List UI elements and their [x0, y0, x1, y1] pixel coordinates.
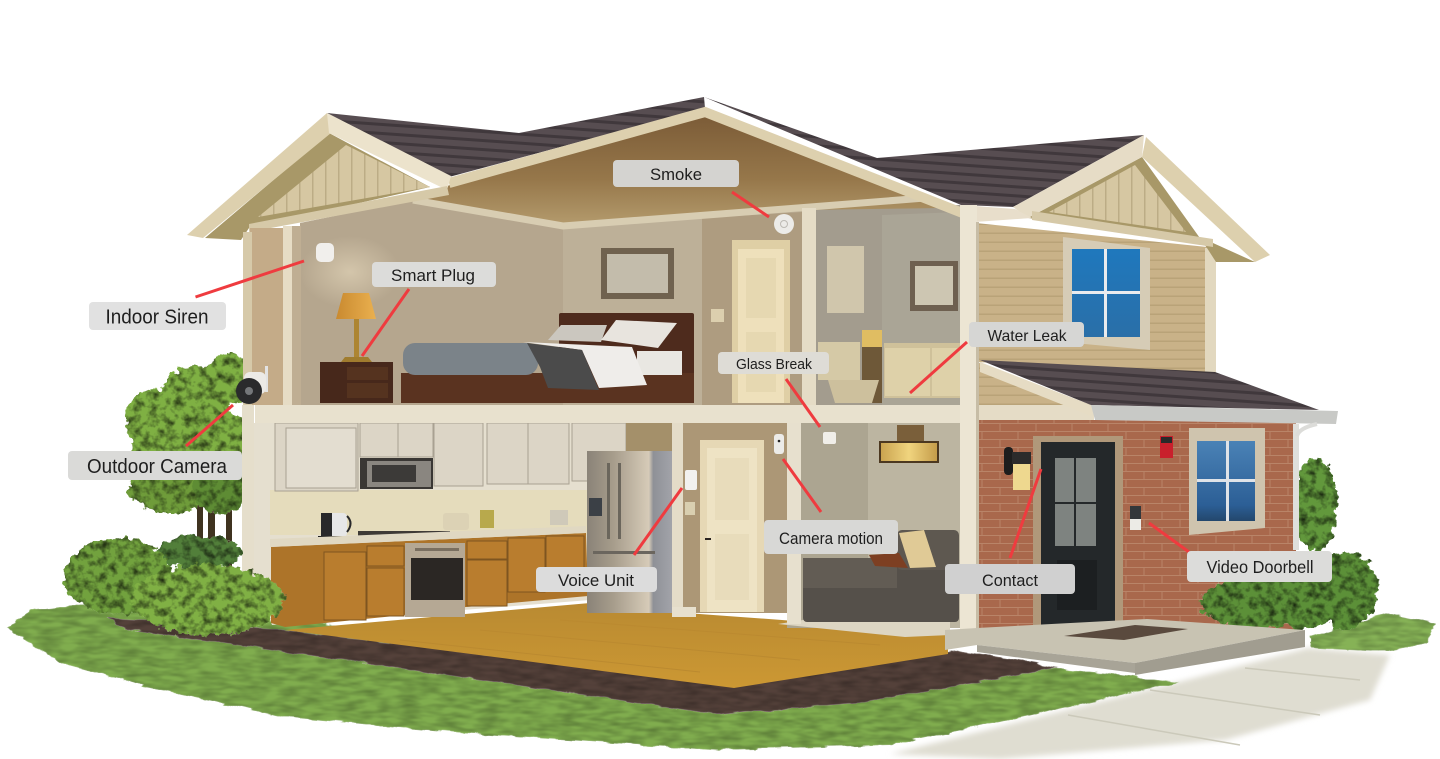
label: Video Doorbell [1187, 551, 1332, 582]
label: Contact: Contact [982, 571, 1038, 590]
device: motion sensor [774, 434, 784, 454]
lower hall [672, 423, 787, 617]
line: contact [1010, 469, 1041, 558]
kitchen [254, 423, 673, 627]
bed [401, 313, 694, 403]
oven [405, 543, 465, 617]
sofa [803, 530, 959, 622]
fridge [587, 451, 673, 613]
vanity [884, 343, 960, 398]
bathroom mirror [827, 246, 864, 313]
label: Glass Break [718, 352, 829, 374]
left bushes [63, 535, 284, 635]
device: outdoor camera [236, 366, 268, 404]
label: Voice Unit [536, 567, 657, 592]
line: video doorbell [1149, 523, 1189, 552]
central exterior column [960, 205, 979, 630]
label: Outdoor Camera: Outdoor Camera [87, 456, 228, 478]
line: water leak [910, 342, 967, 393]
label: Camera motion [764, 520, 898, 554]
upper cabinets [275, 423, 626, 491]
porch siding [977, 362, 1091, 405]
sidewalk [890, 648, 1390, 759]
mulch bed [105, 618, 1060, 715]
porch roof [980, 360, 1338, 550]
lawn [7, 605, 1436, 750]
right roof shingles [704, 97, 1144, 207]
callout lines [186, 192, 1189, 558]
rug [778, 620, 950, 637]
ceiling lamp [880, 425, 938, 462]
line: smoke [732, 192, 769, 217]
label: Smoke: Smoke [650, 165, 702, 184]
label: Smoke [613, 160, 739, 187]
table lamp [336, 293, 376, 362]
device: voice unit [685, 470, 697, 490]
concrete step [945, 619, 1305, 675]
line: voice unit [634, 488, 682, 555]
right upper siding [976, 223, 1216, 373]
microwave [360, 458, 433, 489]
right bush [1200, 552, 1378, 630]
device: indoor siren [316, 243, 334, 262]
alarm panel [1160, 436, 1173, 458]
column [787, 423, 801, 624]
house upper storey interior [300, 112, 960, 405]
porch light [1004, 447, 1031, 490]
label: Water Leak [969, 322, 1084, 347]
living room [778, 423, 960, 637]
device: video doorbell [1130, 506, 1141, 530]
left roof shingles [327, 97, 705, 177]
device: smoke detector [774, 214, 794, 234]
device: glass break sensor [823, 432, 836, 444]
right gable [961, 135, 1270, 262]
front door [1033, 436, 1123, 630]
label: Video Doorbell: Video Doorbell [1206, 557, 1314, 577]
line: outdoor camera [186, 405, 233, 446]
label: Contact [945, 564, 1075, 594]
nightstand [320, 362, 393, 403]
upstairs door [732, 240, 790, 403]
countertop [270, 526, 586, 547]
line: indoor siren [196, 261, 304, 297]
toilet and candle [818, 330, 882, 403]
porch window [1189, 428, 1265, 535]
label: Water Leak: Water Leak [988, 328, 1067, 345]
label: Indoor Siren [89, 302, 226, 330]
ceiling [413, 112, 945, 224]
label: Outdoor Camera [68, 451, 242, 480]
line: camera motion [783, 459, 821, 512]
label: Camera motion: Camera motion [779, 530, 883, 548]
upper right window [1063, 237, 1150, 350]
bathroom picture [910, 261, 958, 311]
picture: bedroom [601, 248, 674, 299]
wall plate [685, 502, 695, 515]
base cabinets [271, 533, 588, 627]
label: Voice Unit: Voice Unit [558, 571, 634, 590]
label: Indoor Siren: Indoor Siren [106, 306, 208, 328]
light switch [711, 309, 724, 322]
floor slab [255, 405, 1094, 423]
countertop items [358, 510, 568, 536]
right tree [1293, 459, 1337, 551]
line: glass break [786, 379, 820, 427]
line: smart plug [362, 289, 409, 356]
label: Glass Break: Glass Break [736, 356, 812, 373]
ceiling trim [413, 198, 925, 226]
label: Smart Plug: Smart Plug [391, 266, 475, 285]
brick wall [979, 420, 1296, 630]
hall door [700, 440, 764, 612]
wood floor [285, 603, 948, 688]
interior post [802, 208, 816, 405]
left tree [125, 354, 254, 570]
left gable [187, 113, 451, 240]
main gable trim [449, 112, 965, 214]
kettle [318, 513, 350, 539]
left wall column [242, 226, 301, 580]
label: Smart Plug [372, 262, 496, 287]
